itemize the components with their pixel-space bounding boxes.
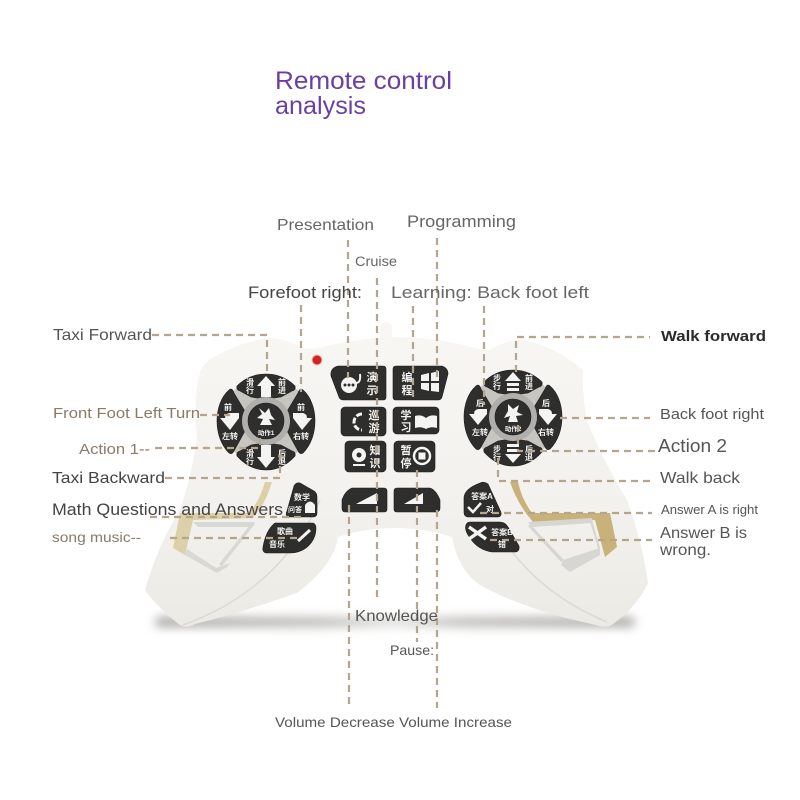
grip seam lines: [183, 500, 607, 625]
button: learning: 习: [400, 421, 412, 434]
bottom petal: taxi backward: 行: [246, 456, 254, 466]
top petal: taxi forward: 滑: [246, 377, 254, 387]
red indicator: [312, 355, 322, 365]
left petal: front foot left turn: 前: [224, 402, 232, 412]
button: answer A: [464, 482, 501, 517]
top petal: walk forward: [484, 370, 542, 394]
bottom petal: taxi backward: 后: [278, 448, 286, 458]
title: analysis: [275, 92, 366, 120]
button: cruise: 巡: [368, 408, 380, 422]
bottom petal: walk back: [484, 440, 542, 466]
left petal: back foot left: 左转: [472, 427, 488, 437]
button: pause: 暂: [400, 444, 412, 457]
silver chevron right: [528, 518, 600, 572]
top petal: taxi forward: [237, 374, 295, 398]
bottom petal: walk back: 后: [525, 444, 533, 454]
gold trim left: [173, 482, 272, 555]
button: answer B: 错: [498, 539, 506, 549]
button: pause: 停: [400, 456, 412, 470]
label: pause: Pause:: [390, 642, 434, 658]
button: answer B: [466, 522, 519, 552]
button: math questions and answers: [286, 483, 317, 517]
gold trim right: [510, 482, 617, 557]
top petal: walk forward: 前: [525, 373, 533, 383]
left petal: back foot left: 后: [476, 398, 484, 408]
button: volume increase: [394, 488, 440, 512]
label: action 2: Action 2: [658, 436, 727, 456]
button: knowledge: 识: [370, 457, 380, 470]
label: learning back foot left: Learning: Back foot left: [391, 283, 589, 302]
button: cruise: 游: [368, 421, 380, 435]
controller shell: [145, 337, 648, 627]
label: answer B is wrong: wrong.: [659, 542, 711, 559]
right petal: back foot right: 后: [542, 398, 550, 408]
right petal: forefoot right: 前: [297, 402, 305, 412]
bottom petal: taxi backward: 滑: [246, 448, 254, 458]
label: volume decrease and increase: Volume Decrease Volume Increase: [275, 714, 512, 730]
button: learning: 学: [400, 408, 412, 422]
label: forefoot right: Forefoot right:: [248, 284, 362, 302]
button: presentation: 演: [366, 370, 378, 384]
button: knowledge: 知: [370, 443, 380, 457]
left petal: front foot left turn: [217, 389, 248, 454]
label: walk back: Walk back: [660, 470, 741, 487]
label: taxi forward: Taxi Forward: [53, 327, 152, 344]
button: volume decrease: [342, 488, 387, 512]
infrared emitter: [380, 322, 392, 340]
button: answer B: 答案B: [491, 527, 513, 537]
right petal: back foot right: 右转: [538, 427, 554, 437]
label: song music: song music--: [52, 529, 141, 545]
bottom petal: walk back: 退: [525, 453, 533, 462]
bottom petal: taxi backward: [237, 444, 295, 470]
top petal: walk forward: 步: [493, 373, 501, 383]
label: front foot left turn: Front Foot Left Turn: [53, 406, 200, 422]
button: presentation: [331, 366, 386, 400]
title: Remote control: [275, 67, 452, 95]
left d-pad: [217, 374, 315, 470]
button: song music: 音乐: [269, 539, 285, 549]
label: action 1: Action 1--: [79, 442, 150, 458]
label: taxi backward: Taxi Backward: [52, 470, 165, 487]
button: answer A: 对: [486, 504, 494, 514]
top petal: taxi forward: 前: [278, 377, 286, 387]
remote control body: [145, 322, 648, 627]
label: presentation: Presentation: [277, 217, 374, 234]
label: math questions and answers: Math Questions and Answers: [52, 501, 283, 519]
label: walk forward: Walk forward: [661, 328, 766, 345]
left petal: back foot left: [464, 385, 494, 450]
button: programming: [393, 366, 448, 400]
button: math questions and answers: 数学: [294, 492, 310, 502]
label: cruise: Cruise: [355, 254, 397, 269]
label: answer A is right: Answer A is right: [661, 503, 759, 517]
silver chevron left: [185, 522, 255, 573]
top petal: taxi forward: 行: [246, 385, 254, 395]
label: programming: Programming: [407, 212, 516, 231]
action 2 button: 动作2: [505, 424, 522, 433]
leader lines: [150, 238, 655, 708]
right petal: forefoot right: [284, 389, 315, 454]
button: answer A: 答案A: [471, 491, 493, 501]
label: knowledge: Knowledge: [355, 608, 438, 625]
label: answer B is wrong: Answer B is: [660, 525, 747, 542]
right petal: back foot right: [532, 385, 562, 450]
action 1 button: 动作1: [258, 428, 275, 437]
bottom petal: walk back: 步: [493, 444, 501, 454]
button: pause: [394, 441, 435, 472]
bottom petal: taxi backward: 退: [278, 457, 286, 466]
button: knowledge: [345, 441, 386, 472]
right petal: forefoot right: 右转: [293, 431, 309, 441]
right d-pad: [464, 370, 562, 466]
button: song music: [263, 523, 316, 553]
button: song music: 歌曲: [277, 526, 293, 536]
label: back foot right: Back foot right: [660, 407, 764, 423]
button: learning: [393, 407, 439, 434]
button: programming: 程: [402, 383, 412, 397]
floor shadow: [155, 617, 635, 627]
title: [275, 67, 452, 120]
left petal: front foot left turn: 左转: [222, 431, 238, 441]
top petal: walk forward: 行: [493, 381, 501, 391]
label: answer B is wrong: [659, 525, 747, 559]
button: presentation: 示: [366, 384, 378, 397]
button: programming: 编: [402, 370, 412, 384]
top petal: walk forward: 进: [525, 381, 533, 391]
button: cruise: [341, 407, 386, 436]
bottom petal: walk back: 行: [493, 452, 501, 462]
button: math questions and answers: 问答: [288, 505, 302, 514]
top petal: taxi forward: 进: [278, 385, 286, 395]
